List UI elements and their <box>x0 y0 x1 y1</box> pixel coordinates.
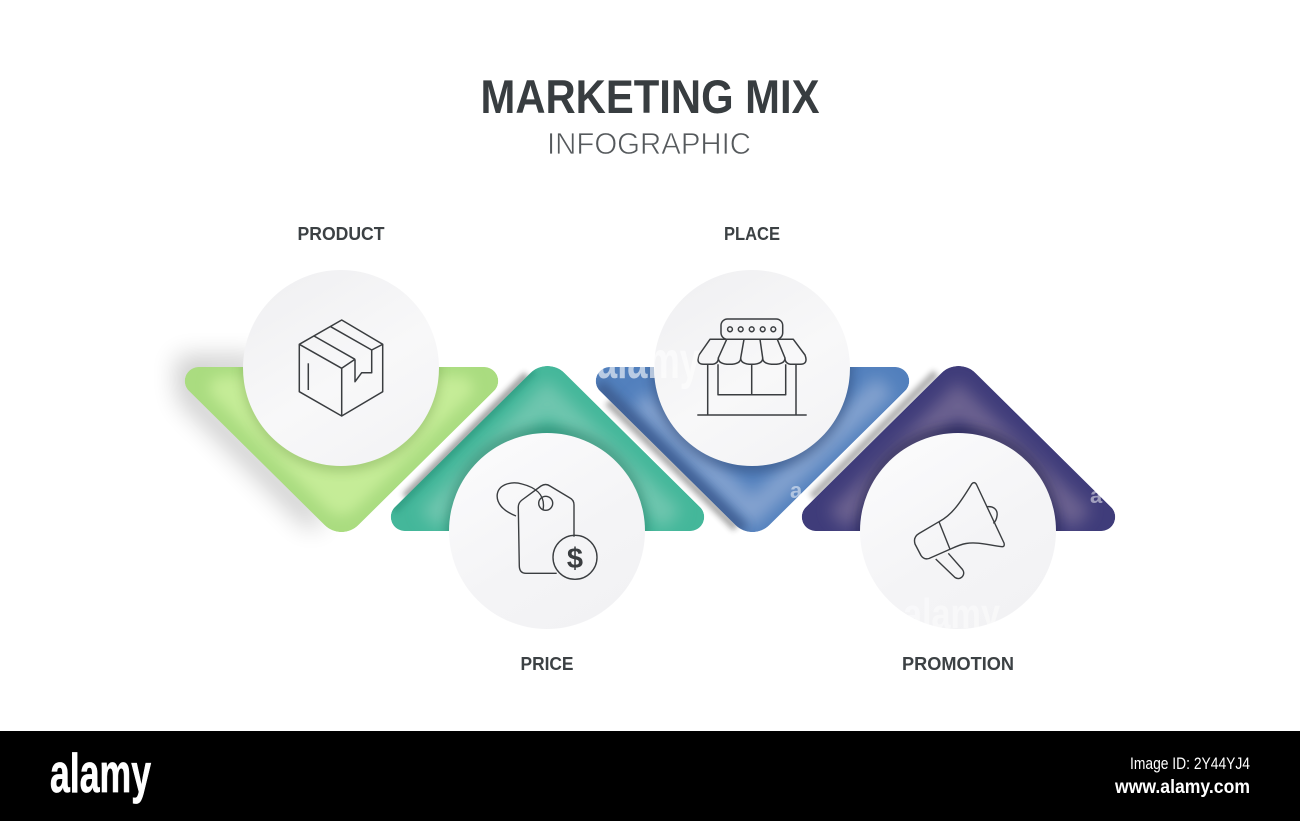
watermarks: alamy <box>597 332 700 390</box>
panel: place <box>596 224 909 532</box>
panel: product <box>185 224 498 532</box>
price circle <box>449 433 645 629</box>
watermarks: a <box>1090 483 1103 508</box>
place circle <box>654 270 850 466</box>
dollar sign: $ <box>567 543 583 575</box>
purple triangle shadow <box>812 373 936 497</box>
green triangle <box>184 367 498 532</box>
promotion circle <box>860 433 1056 629</box>
watermarks: a <box>790 478 803 503</box>
website: www.alamy.com <box>1114 777 1250 798</box>
title: MARKETING MIX <box>480 70 820 123</box>
label: promotion: PROMOTION <box>902 654 1014 674</box>
icon: box <box>299 320 383 416</box>
footer bar <box>0 731 1300 821</box>
panel: price <box>391 366 704 674</box>
watermarks: alamy <box>903 590 1001 637</box>
label: price: PRICE <box>520 654 574 674</box>
purple triangle <box>802 366 1116 531</box>
subtitle: INFOGRAPHIC <box>547 126 751 161</box>
icon: price tag <box>497 483 597 579</box>
image id: Image ID: 2Y44YJ4 <box>1130 754 1250 773</box>
icon: storefront <box>697 319 807 415</box>
teal triangle <box>390 366 704 531</box>
teal triangle shadow <box>405 375 527 497</box>
label: place: PLACE <box>724 224 780 244</box>
green triangle shadow <box>188 368 318 522</box>
label: product: PRODUCT <box>298 224 385 244</box>
alamy logo: alamy <box>50 742 151 804</box>
icon: megaphone <box>914 483 1004 579</box>
blue triangle <box>596 367 910 532</box>
watermarks <box>597 332 1103 637</box>
panel: promotion <box>802 366 1115 674</box>
blue triangle shadow <box>608 402 736 528</box>
product circle <box>243 270 439 466</box>
